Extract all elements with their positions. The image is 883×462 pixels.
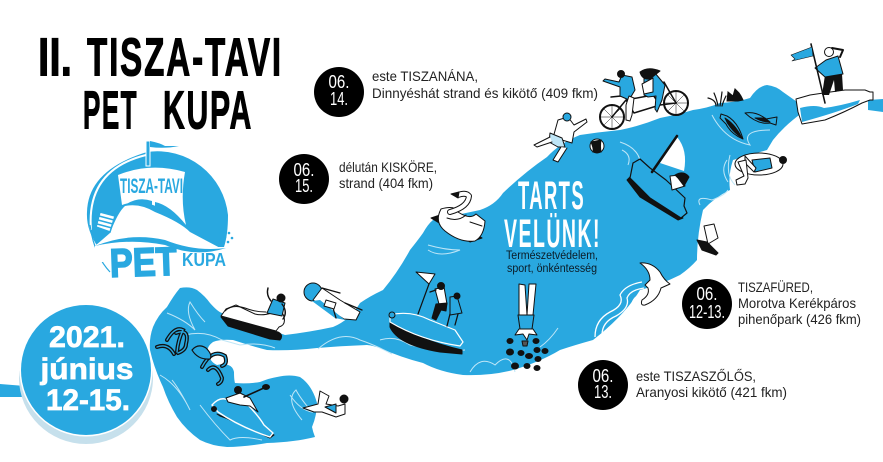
date text (689, 284, 725, 322)
logo disc (87, 151, 228, 247)
illustration: seagull (640, 263, 670, 305)
logo: Tisza-tavi PET Kupa ship (87, 141, 233, 286)
figure legs (822, 74, 843, 95)
badge text: 2021. (49, 321, 125, 354)
illustration: woman with swim ring (735, 153, 786, 185)
stop text: pihenőpark (426 fkm) (738, 311, 861, 327)
stop text (636, 368, 787, 400)
date text: 14. (330, 89, 348, 109)
stop text: este TISZASZŐLŐS, (636, 368, 756, 384)
stop: 06.13 Tiszaszőlős (578, 360, 787, 410)
badge disc (20, 304, 152, 436)
illustration: diver in water (515, 284, 537, 346)
illustration: fish pair (720, 113, 777, 139)
date text (328, 72, 350, 109)
stop text: Aranyosi kikötő (421 fkm) (636, 384, 787, 400)
stop text: Dinnyéshát strand és kikötő (409 fkm) (372, 85, 598, 101)
logo mast and flag (146, 141, 150, 166)
river stub left (0, 384, 25, 397)
text: VELÜNK! (504, 211, 601, 256)
illustration: beach ball (590, 139, 604, 153)
figure torso (815, 48, 843, 77)
date text (294, 160, 314, 196)
illustration: sailing bottle boat (627, 136, 689, 220)
date text: 15. (295, 176, 313, 196)
slogan (504, 174, 601, 275)
stop: 06.15 Kisköre (279, 154, 437, 204)
title: II. (38, 28, 72, 88)
illustration: sunbathing woman (303, 391, 348, 417)
date text (592, 366, 614, 402)
illustration: hat figure at shore (697, 224, 718, 255)
front rider (603, 70, 635, 121)
water ripple lines (160, 115, 770, 440)
illustration: tandem bicycle (600, 69, 688, 129)
badge text (39, 321, 133, 417)
title: TISZA-TAVI (87, 28, 283, 88)
river stub right (868, 99, 883, 112)
flag (791, 47, 813, 61)
sail (660, 137, 685, 171)
stop text (372, 68, 598, 101)
illustration: woman with hat on float (304, 283, 362, 320)
logo outer arc cut (91, 155, 146, 268)
slogan subtitle: sport, önkéntesség (507, 263, 597, 275)
illustration: swan boat (431, 192, 485, 242)
hull shadow (627, 175, 683, 220)
logo wave (95, 237, 226, 252)
date circle (578, 360, 628, 410)
bike frame (611, 82, 676, 117)
lake shape (150, 85, 802, 447)
hull (630, 159, 687, 218)
title: PET (83, 80, 138, 140)
swirl lines near gull (595, 282, 644, 337)
slogan subtitle (506, 250, 598, 275)
rear rider (640, 69, 665, 112)
date text: 06. (592, 366, 614, 386)
date text: 06. (294, 160, 314, 180)
slogan subtitle: Természetvédelem, (506, 250, 598, 262)
illustration: boat with flag and couple (389, 272, 463, 354)
date text: 06. (696, 284, 718, 304)
map: lake with river (0, 85, 883, 447)
logo bubbles (220, 228, 233, 243)
stop text: Morotva Kerékpáros (738, 295, 856, 311)
bottle (796, 90, 873, 124)
illustration: reeds and bush (708, 89, 743, 106)
illustration: octopus tentacles (157, 329, 226, 384)
logo PET: PET (109, 240, 178, 286)
slogan headline (504, 174, 601, 256)
flag pole (811, 44, 825, 103)
stop text: strand (404 fkm) (339, 175, 433, 191)
date badge (19, 304, 153, 444)
badge shadow (19, 312, 153, 444)
date text: 12-13. (689, 302, 725, 322)
illustration: person on bottle with flag (791, 44, 873, 124)
badge text: 12-15. (46, 384, 130, 417)
date circle (682, 279, 732, 329)
logo deck grille (96, 212, 115, 232)
title: KUPA (163, 80, 253, 140)
bike wheels (600, 91, 688, 129)
stop text: este TISZANÁNA, (372, 68, 478, 84)
stop text: délután KISKÖRE, (339, 158, 437, 175)
title (38, 28, 283, 140)
logo KUPA: KUPA (182, 250, 226, 270)
date circle (279, 154, 329, 204)
logo sail (118, 168, 186, 225)
stop text: TISZAFÜRED, (738, 278, 813, 295)
illustration: running man (534, 113, 587, 162)
badge text: június (39, 353, 133, 386)
date text: 13. (594, 382, 612, 402)
stop text (339, 158, 437, 191)
logo sail text: TISZA-TAVI (120, 175, 183, 198)
stop text (738, 278, 861, 327)
illustration: black rocks (506, 338, 548, 371)
stop: 06.14 Tiszanána (314, 67, 598, 117)
mast (652, 136, 677, 172)
illustration: kayaker on bottle (212, 384, 274, 438)
date circle (314, 67, 364, 117)
logo hull (92, 205, 224, 262)
logo blue sail stripe (125, 199, 186, 225)
date text: 06. (328, 72, 350, 92)
sailor (670, 173, 689, 190)
slogan headline: TARTS (518, 174, 585, 218)
stop: 06.12-13 Tiszafüred (682, 278, 861, 329)
illustration: man on bottle boat (221, 288, 285, 340)
